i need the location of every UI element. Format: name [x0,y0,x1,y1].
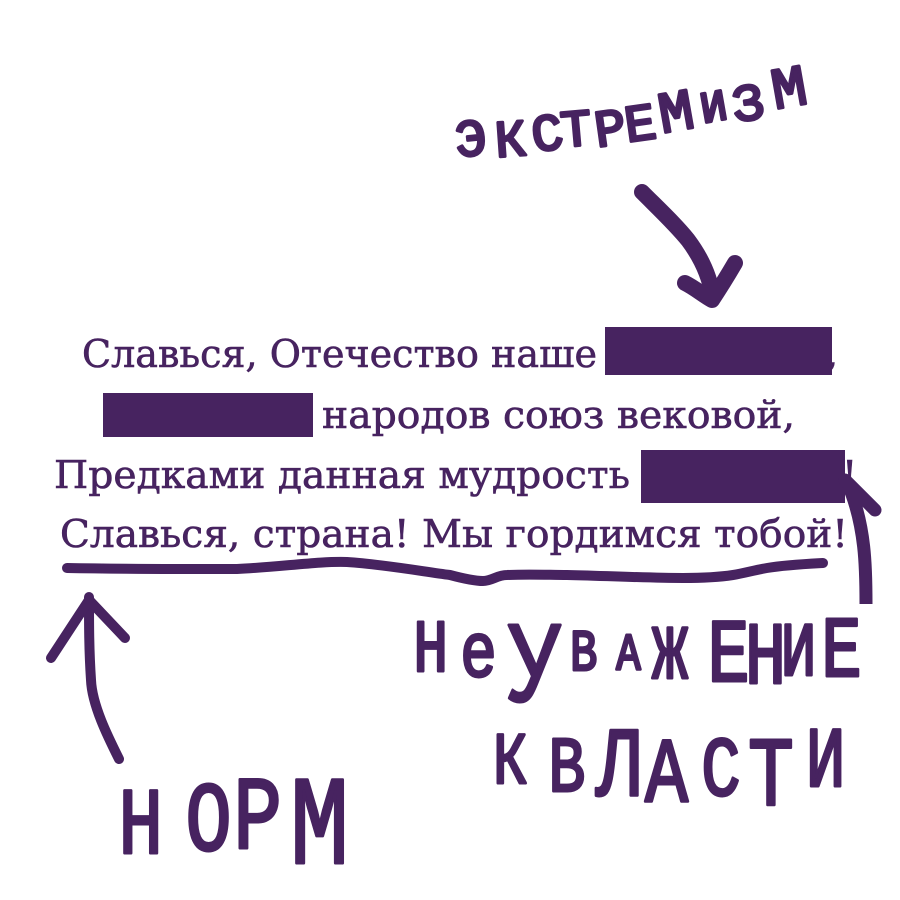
handwritten label: to the authorities: С [701,725,741,821]
handwritten label: extremism: И [697,83,731,137]
handwritten label: norm: О [186,770,232,880]
arrow: disrespect pointing up to redaction [845,480,875,604]
lyric line 3 exclamation mark: ! [842,453,857,497]
handwritten label: disrespect: Н [745,609,786,710]
handwritten label: norm: Р [233,762,282,880]
handwritten label: extremism: З [729,75,768,138]
lyric line 4: Славься, страна! Мы гордимся тобой! [60,512,848,556]
lyric line 1 comma: , [826,332,838,376]
handwritten label: to the authorities: А [645,724,689,829]
handwritten label: disrespect: А [616,627,641,686]
redaction box 2 [103,393,313,437]
handwritten label: to the authorities: Т [748,725,794,835]
handwritten label: disrespect: Ж [652,616,688,701]
handwritten label: to the authorities: И [806,716,846,812]
lyric line 2: народов союз вековой, [322,393,795,437]
handwritten label: to the authorities: К [493,723,527,805]
handwritten label: norm: М [290,758,349,900]
handwritten label: disrespect: е [460,612,497,701]
handwritten label: disrespect: В [570,622,597,688]
handwritten label: extremism: К [493,112,528,173]
handwritten label: to the authorities: В [548,726,585,816]
handwritten label: disrespect: И [781,613,816,698]
handwritten label: to the authorities: Л [595,715,642,825]
handwritten label: extremism: М [767,57,812,127]
redaction box 3 [641,450,845,503]
handwritten label: extremism: М [654,81,699,151]
handwritten label: norm: Н [119,774,163,882]
arrow: norm pointing up to line 4 [51,597,125,759]
lyrics text block [54,327,857,556]
lyric line 1: Славься, Отечество наше [82,332,597,376]
arrow: extremism pointing down to redaction [642,192,735,300]
handwritten label: disrespect: Н [413,610,448,693]
redaction box 1 [605,327,832,375]
handwritten label: disrespect: Е [821,606,862,703]
handwritten label: extremism: Т [558,101,594,163]
handwritten label: extremism: Э [453,111,490,173]
handwritten label: extremism: С [528,105,567,168]
handwritten label: extremism: Р [591,100,630,163]
underline below line 4 [67,562,823,581]
handwritten label: disrespect: Е [707,607,750,709]
lyric line 3: Предками данная мудрость [54,453,630,497]
handwritten label: disrespect: У [508,605,562,736]
handwritten label: extremism: Е [621,95,660,158]
